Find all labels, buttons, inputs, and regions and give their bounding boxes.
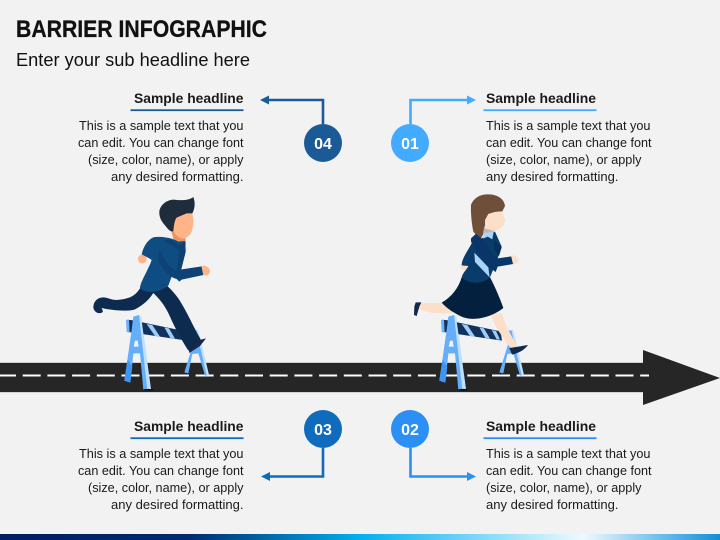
text block 02: Sample headline <box>486 418 596 434</box>
text block 03: (size, color, name), or apply <box>88 481 244 495</box>
step 03: connector and badge: 03 <box>314 422 332 439</box>
text block 03: can edit. You can change font <box>78 464 244 478</box>
collar <box>483 231 494 239</box>
woman upper body <box>460 194 518 283</box>
text block 04: Sample headline <box>134 90 244 106</box>
text block 01: Sample headline <box>486 90 596 106</box>
back hand <box>138 255 147 263</box>
jacket <box>140 237 186 292</box>
step 04: connector and badge: 04 <box>314 136 332 153</box>
front arm <box>471 234 513 272</box>
woman legs, shoes and skirt <box>414 276 528 355</box>
collar <box>163 240 186 272</box>
text block 04 <box>78 90 244 184</box>
step 02: connector and badge: 02 <box>401 422 419 439</box>
text block 02: (size, color, name), or apply <box>486 481 642 495</box>
text block 01: (size, color, name), or apply <box>486 153 642 167</box>
text block 04: can edit. You can change font <box>78 136 244 150</box>
footer gradient bar <box>0 534 720 540</box>
front arm <box>158 250 203 282</box>
step 01: connector and badge: 01 <box>401 136 419 153</box>
back hand <box>460 265 468 270</box>
text block 02: can edit. You can change font <box>486 464 652 478</box>
step 02: connector and badge <box>391 410 476 481</box>
text block 03: any desired formatting. <box>111 498 244 512</box>
text block 04: This is a sample text that you <box>79 119 244 133</box>
man upper body <box>138 197 210 292</box>
hair <box>471 194 505 240</box>
hurdle: right <box>439 315 524 390</box>
illustration: woman jumping <box>414 194 528 355</box>
face <box>485 211 505 231</box>
front hand <box>201 266 210 276</box>
text block 01 <box>484 90 652 184</box>
step 03: connector and badge <box>261 410 342 481</box>
hair <box>159 197 195 231</box>
text block 01: any desired formatting. <box>486 170 618 184</box>
text block 02: any desired formatting. <box>486 498 618 512</box>
neck <box>171 228 186 246</box>
neck <box>483 226 495 234</box>
text block 04: (size, color, name), or apply <box>88 153 244 167</box>
man legs and shoe <box>93 286 206 353</box>
step 04: connector and badge <box>260 96 342 162</box>
illustration: man jumping <box>93 197 210 353</box>
sash <box>474 253 490 277</box>
text block 03: This is a sample text that you <box>79 447 244 461</box>
text block 02 <box>484 418 652 512</box>
text block 01: This is a sample text that you <box>486 119 651 133</box>
text block 03 <box>78 418 244 512</box>
title: BARRIER INFOGRAPHIC <box>16 16 267 43</box>
step 01: connector and badge <box>391 96 476 162</box>
front hand <box>511 255 518 264</box>
text block 03: Sample headline <box>134 418 244 434</box>
road arrow <box>0 350 720 405</box>
subtitle: Enter your sub headline here <box>16 49 250 70</box>
text block 02: This is a sample text that you <box>486 447 651 461</box>
text block 04: any desired formatting. <box>111 170 244 184</box>
face <box>173 213 193 238</box>
text block 01: can edit. You can change font <box>486 136 652 150</box>
jacket <box>462 232 502 283</box>
hurdle: left <box>124 315 209 390</box>
lapel <box>494 240 502 256</box>
